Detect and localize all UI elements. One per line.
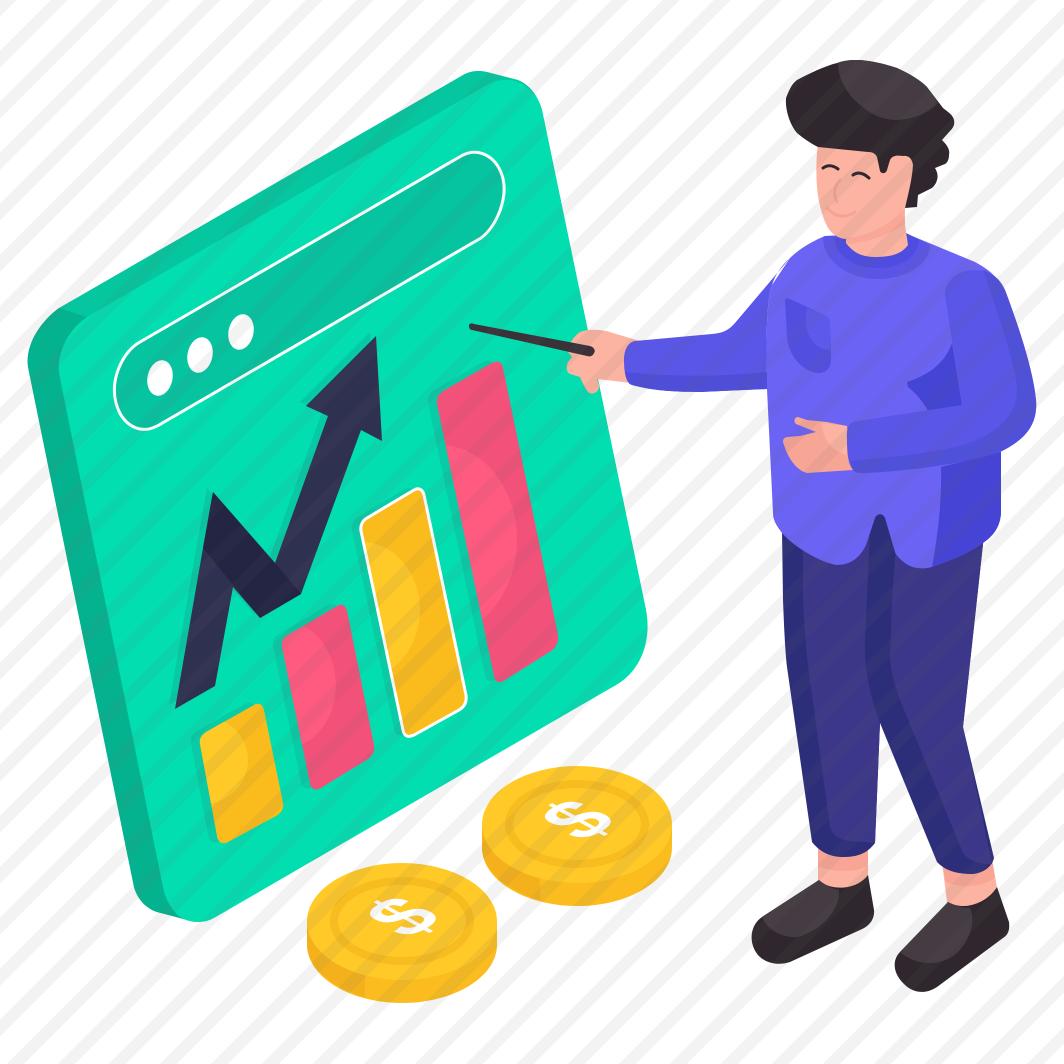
collar outer xyxy=(823,233,930,279)
sock: right xyxy=(942,858,999,925)
neck shadow xyxy=(846,210,905,244)
shoe: left xyxy=(752,875,874,964)
person xyxy=(469,60,1036,992)
nose xyxy=(835,180,840,202)
shoe: right xyxy=(895,887,1009,992)
eye: right xyxy=(853,173,869,178)
coin: upper: $ xyxy=(520,788,635,851)
pants xyxy=(782,500,994,874)
board top edge xyxy=(28,71,646,922)
board face xyxy=(59,80,648,922)
hair highlight xyxy=(838,60,938,120)
coin: lower: $ xyxy=(345,885,460,948)
collar inner xyxy=(834,233,919,268)
coin: upper xyxy=(482,766,672,906)
hand: on belly xyxy=(783,417,853,473)
hand: pointing xyxy=(567,330,640,394)
pocket xyxy=(785,298,831,373)
sock: left xyxy=(818,845,868,900)
bar 1 xyxy=(191,702,284,844)
sweater body xyxy=(767,233,1001,568)
arm: on belly xyxy=(847,270,1036,473)
pointer stick xyxy=(469,323,595,356)
face and neck xyxy=(816,135,918,257)
head xyxy=(786,60,954,257)
arm: pointing xyxy=(624,258,790,392)
hair xyxy=(786,60,954,208)
bar 2 xyxy=(273,604,374,790)
address bar dot 2 xyxy=(184,335,216,375)
address bar xyxy=(114,152,504,429)
bar 3 xyxy=(352,487,468,738)
bar 4 xyxy=(428,360,558,682)
address bar dot 1 xyxy=(144,358,176,398)
board left edge xyxy=(28,308,195,922)
eye: left xyxy=(823,166,838,169)
armpit shadow xyxy=(907,343,962,411)
growth arrow xyxy=(169,332,382,709)
panel: dashboard board xyxy=(28,71,648,922)
sweater shaded side xyxy=(932,452,1001,567)
address bar dot 3 xyxy=(225,312,257,352)
mouth xyxy=(827,208,855,216)
coin: lower xyxy=(307,863,497,1003)
sock shadows xyxy=(818,850,995,886)
